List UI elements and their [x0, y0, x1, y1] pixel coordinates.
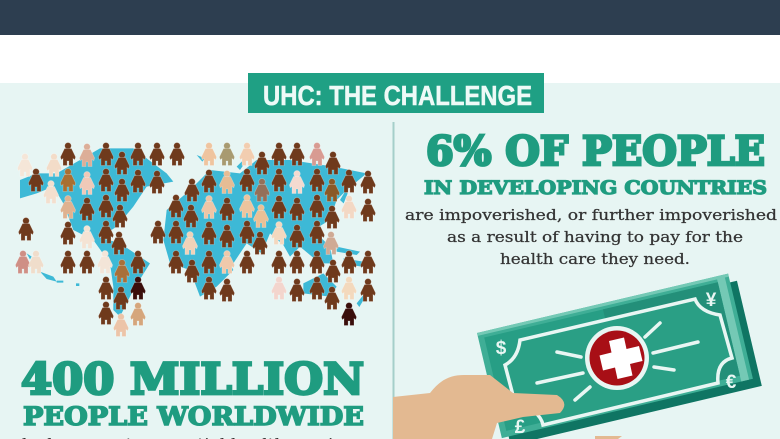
currency symbols: ¥: [706, 290, 717, 311]
top navigation band: [0, 0, 780, 35]
heading: UHC the challenge: UHC: THE CHALLENGE: [263, 80, 532, 111]
note frame: [505, 299, 732, 425]
people figures over map: [15, 142, 376, 336]
text: impoverishment description: as a result of having to pay for the: [447, 230, 743, 246]
currency symbols: [496, 290, 737, 438]
stat: 400 million people worldwide: [21, 355, 364, 431]
banknote stack: [477, 272, 762, 439]
text: impoverishment description: health care they need.: [500, 252, 690, 268]
currency symbols: €: [726, 372, 737, 393]
currency symbols: £: [515, 417, 526, 438]
icon: hand holding banknote: [393, 272, 762, 439]
stat: 400 million people worldwide: PEOPLE WORLDWIDE: [23, 402, 364, 431]
hand with pointing finger: [393, 375, 564, 439]
stat: 6% of people in developing countries: IN DEVELOPING COUNTRIES: [424, 177, 767, 199]
red cross emblem: [585, 326, 649, 390]
heading: UHC the challenge: [248, 73, 544, 113]
note rays: [537, 323, 698, 400]
stat: 400 million people worldwide: 400 MILLION: [21, 355, 364, 405]
currency symbols: $: [496, 338, 507, 359]
world map: [20, 148, 367, 317]
text: impoverishment description: are impoverished, or further impoverished: [405, 208, 777, 224]
hand palm behind the note: [595, 436, 622, 439]
stat: 6% of people in developing countries: 6% OF PEOPLE: [426, 128, 765, 175]
text: impoverishment description: [405, 208, 777, 268]
stat: 6% of people in developing countries: [424, 128, 767, 199]
